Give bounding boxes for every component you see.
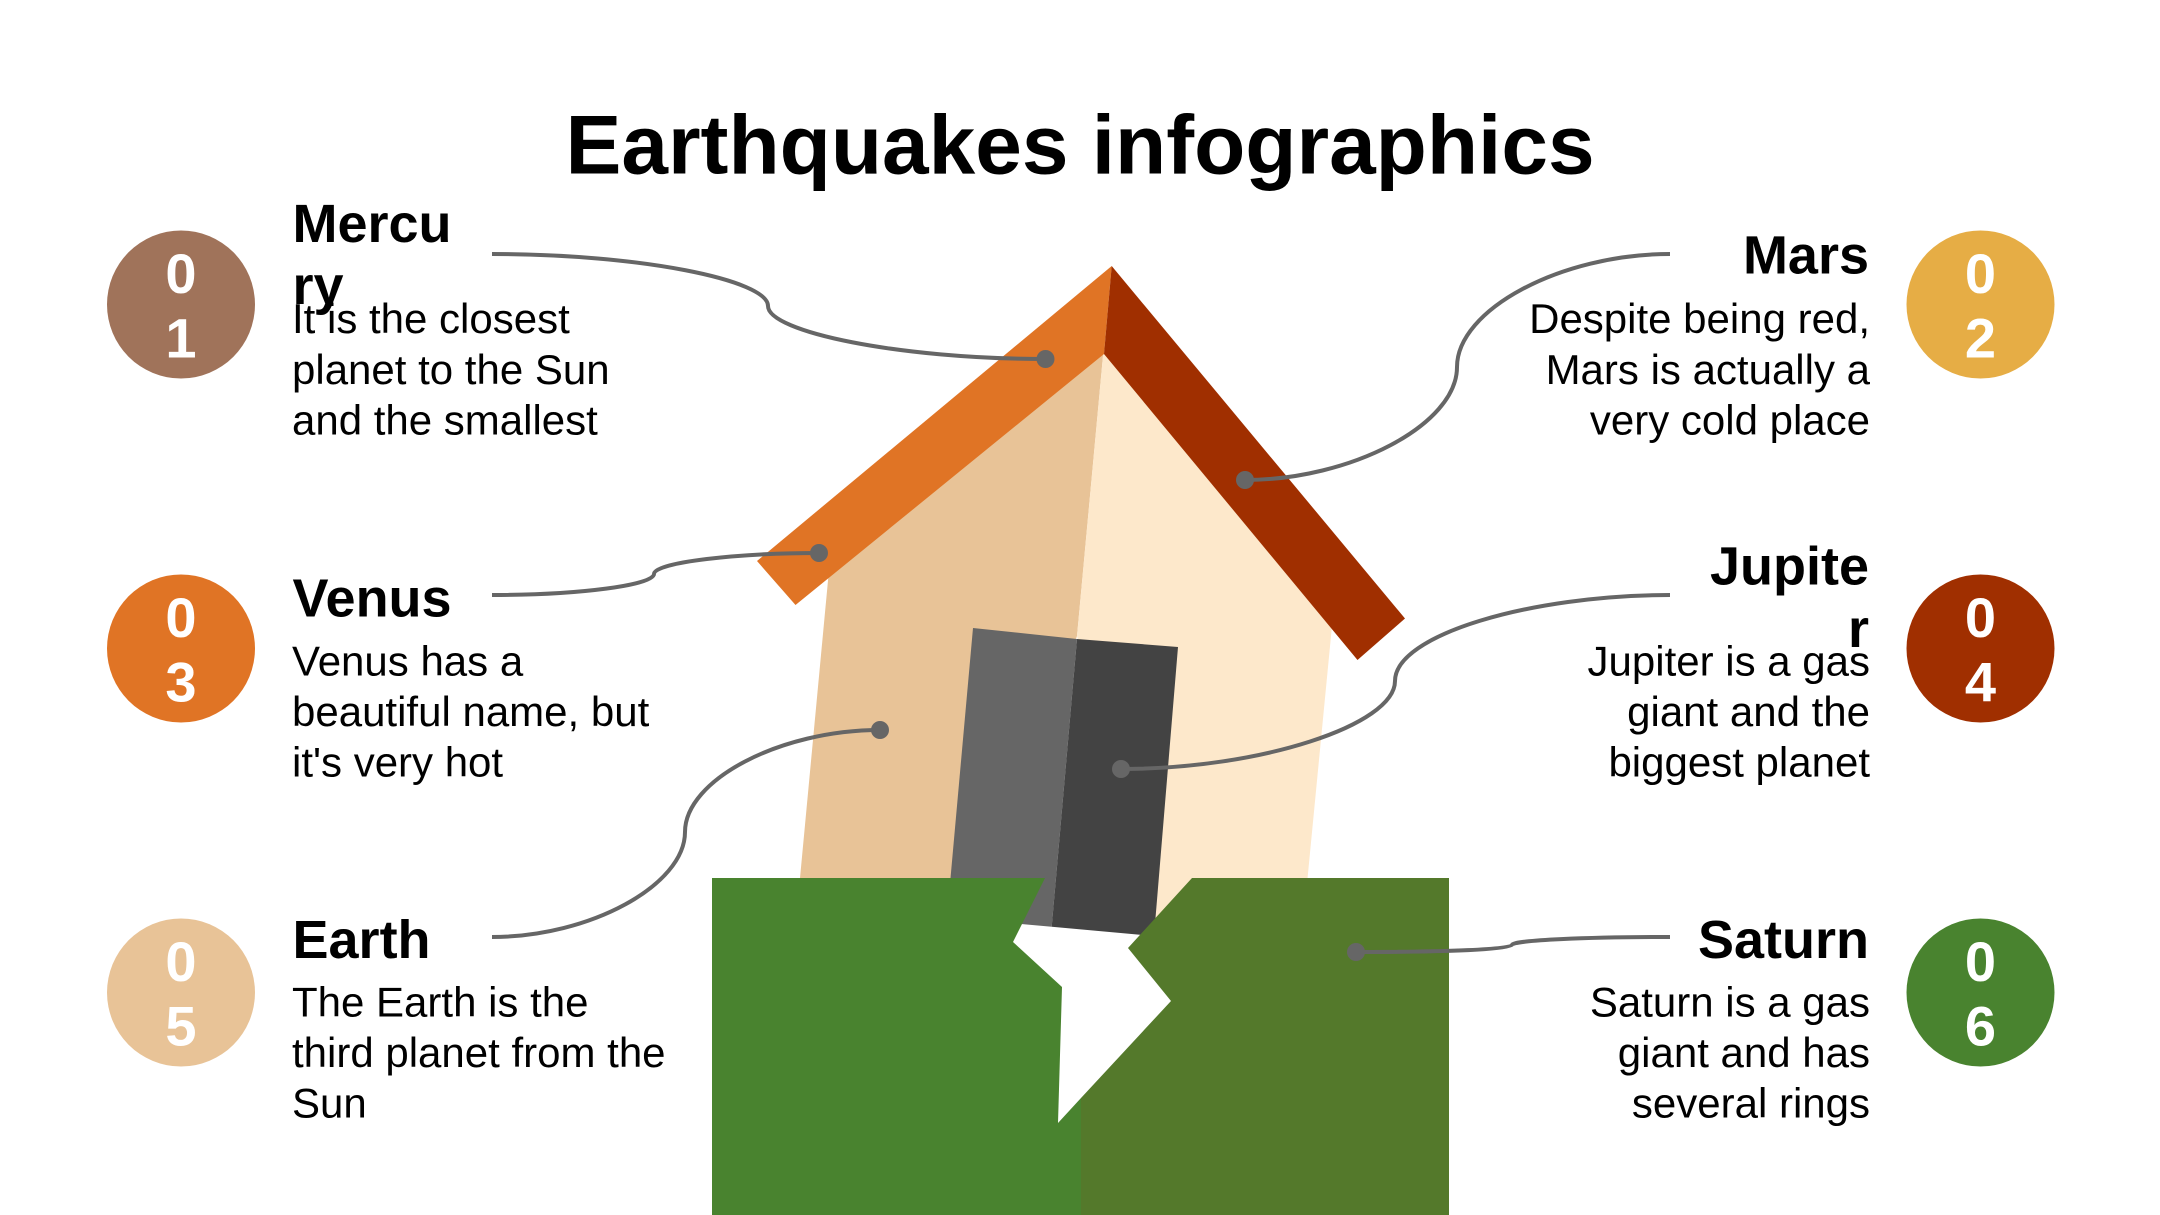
connector: Earth to wall	[492, 721, 889, 937]
house right wall	[1077, 345, 1334, 925]
badge 03: 3	[165, 650, 197, 714]
badge 04: 0	[1965, 586, 1996, 649]
connector: Mars to roof	[1236, 254, 1670, 489]
heading: Mars: Mars	[1743, 226, 1869, 286]
text: Mercury description: and the smallest	[292, 396, 598, 444]
heading: Mercury	[292, 194, 452, 316]
text: Jupiter description	[1588, 638, 1870, 786]
text: Venus description: it's very hot	[292, 738, 503, 786]
badge 06: 6	[1965, 994, 1996, 1058]
house left wall	[800, 345, 1104, 878]
panel: 04 Jupiter	[1588, 536, 2054, 786]
badge 06: 0	[1965, 930, 1996, 993]
panel: 06 Saturn	[1590, 910, 2054, 1126]
text: Mars description: very cold place	[1590, 396, 1870, 444]
panel: 02 Mars	[1529, 226, 2054, 444]
connector: Jupiter to door	[1112, 595, 1670, 778]
heading: Mercury: ry	[292, 256, 344, 316]
heading: Venus: Venus	[292, 568, 452, 628]
text: Mars description: Mars is actually a	[1546, 346, 1871, 393]
badge 05: 5	[165, 994, 197, 1058]
panel: 01 Mercury	[107, 194, 610, 444]
text: Venus description: Venus has a	[292, 638, 524, 684]
ground: left block	[712, 878, 1081, 1215]
text: Saturn description: giant and has	[1618, 1029, 1870, 1076]
illustration: house on cracked ground	[712, 266, 1449, 1215]
badge 02	[1906, 230, 2054, 378]
text: Mercury description	[292, 295, 610, 444]
text: Earth description: Sun	[292, 1080, 367, 1126]
text: Mars description: Despite being red,	[1529, 295, 1870, 342]
heading: Jupiter: Jupite	[1710, 536, 1869, 596]
badge 04: 4	[1965, 650, 1996, 714]
roof: right slope	[1104, 266, 1405, 660]
text: Saturn description: Saturn is a gas	[1590, 978, 1870, 1026]
text: Earth description: third planet from the	[292, 1029, 666, 1076]
text: Mars description	[1529, 295, 1871, 444]
badge 05	[107, 918, 255, 1066]
title: Earthquakes infographics	[565, 98, 1595, 192]
ground: right block	[1081, 878, 1449, 1215]
text: Jupiter description: giant and the	[1627, 688, 1870, 735]
badge 01: 0	[165, 242, 197, 305]
badge 03	[107, 574, 255, 722]
door: lit side	[947, 628, 1077, 927]
text: Jupiter description: biggest planet	[1608, 738, 1870, 786]
connector: Saturn to ground	[1347, 937, 1670, 961]
text: Mercury description: planet to the Sun	[292, 346, 610, 393]
badge 02: 2	[1965, 306, 1996, 370]
roof: left slope	[757, 266, 1112, 605]
heading: Jupiter: r	[1848, 599, 1869, 659]
door: shaded side	[1052, 639, 1178, 936]
badge 02: 0	[1965, 242, 1996, 305]
text: Mercury description: It is the closest	[292, 295, 570, 342]
panel: 03 Venus	[107, 568, 650, 786]
heading: Mercury: Mercu	[292, 194, 452, 254]
text: Saturn description	[1590, 978, 1870, 1126]
heading: Earth: Earth	[292, 910, 431, 970]
badge 05: 0	[165, 930, 197, 993]
text: Earth description: The Earth is the	[292, 978, 588, 1026]
heading: Jupiter	[1710, 536, 1869, 659]
text: Venus description	[292, 638, 650, 786]
badge 01: 1	[165, 306, 197, 370]
badge 03: 0	[165, 586, 197, 649]
text: Jupiter description: Jupiter is a gas	[1588, 638, 1870, 684]
badge 06	[1906, 918, 2054, 1066]
badge 04	[1906, 574, 2054, 722]
heading: Saturn: Saturn	[1698, 910, 1869, 970]
text: Earth description	[292, 978, 666, 1126]
text: Venus description: beautiful name, but	[292, 688, 650, 735]
badge 01	[107, 230, 255, 378]
connector: Venus to roof	[492, 544, 828, 595]
panel: 05 Earth	[107, 910, 666, 1126]
text: Saturn description: several rings	[1632, 1080, 1870, 1126]
connector: Mercury to roof	[492, 254, 1054, 368]
